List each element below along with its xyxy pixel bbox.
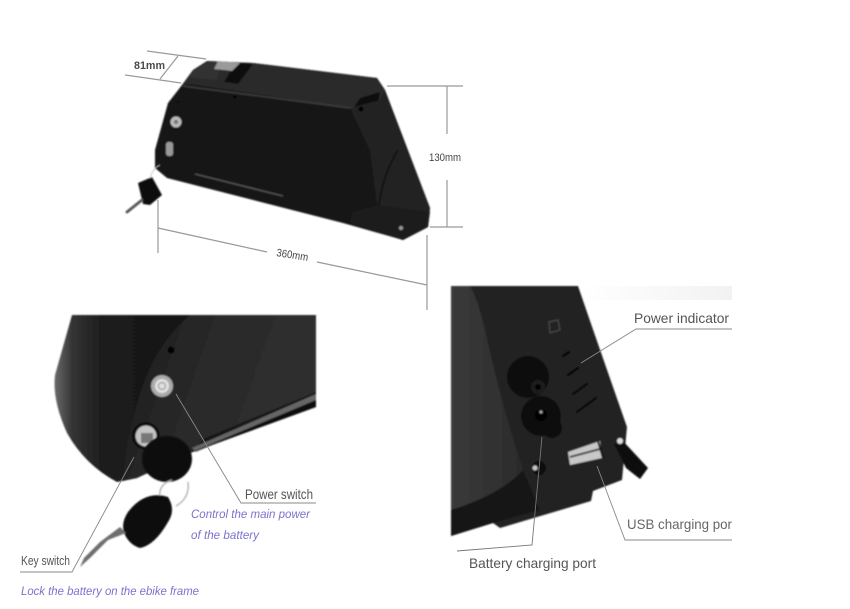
background patch (578, 286, 732, 300)
label: power indicator: Power indicator (634, 310, 729, 326)
icon: power indicator slots (563, 352, 596, 412)
battery body (155, 61, 430, 240)
panel: charging ports closeup (451, 286, 732, 571)
description: power switch: Control the main power (191, 509, 311, 521)
label: 81mm: 81mm (134, 60, 165, 72)
description: key switch: Lock the battery on the ebike frame (21, 586, 199, 598)
dimension lines (125, 51, 463, 310)
icon: key (127, 165, 162, 212)
label: USB charging port: USB charging por (627, 516, 732, 532)
panel: key and power switch closeup (20, 315, 316, 598)
battery closeup (451, 286, 648, 536)
icon: key stub (614, 440, 648, 479)
label: 360mm: 360mm (276, 247, 309, 264)
icon: USB port (568, 441, 602, 465)
label: key switch: Key switch (21, 553, 70, 568)
leader lines (20, 394, 316, 572)
description: power switch: of the battery (191, 530, 260, 542)
panel: battery dimensions (125, 51, 463, 310)
leader lines (581, 329, 732, 540)
label: 130mm: 130mm (429, 152, 461, 164)
icon: charging port (521, 396, 561, 436)
icon: rubber plug (507, 356, 549, 398)
icon: key fob and key (80, 436, 192, 567)
description: power switch (191, 509, 311, 542)
label: power switch: Power switch (245, 486, 313, 502)
label: battery charging port: Battery charging port (469, 555, 596, 571)
battery closeup (54, 315, 316, 482)
